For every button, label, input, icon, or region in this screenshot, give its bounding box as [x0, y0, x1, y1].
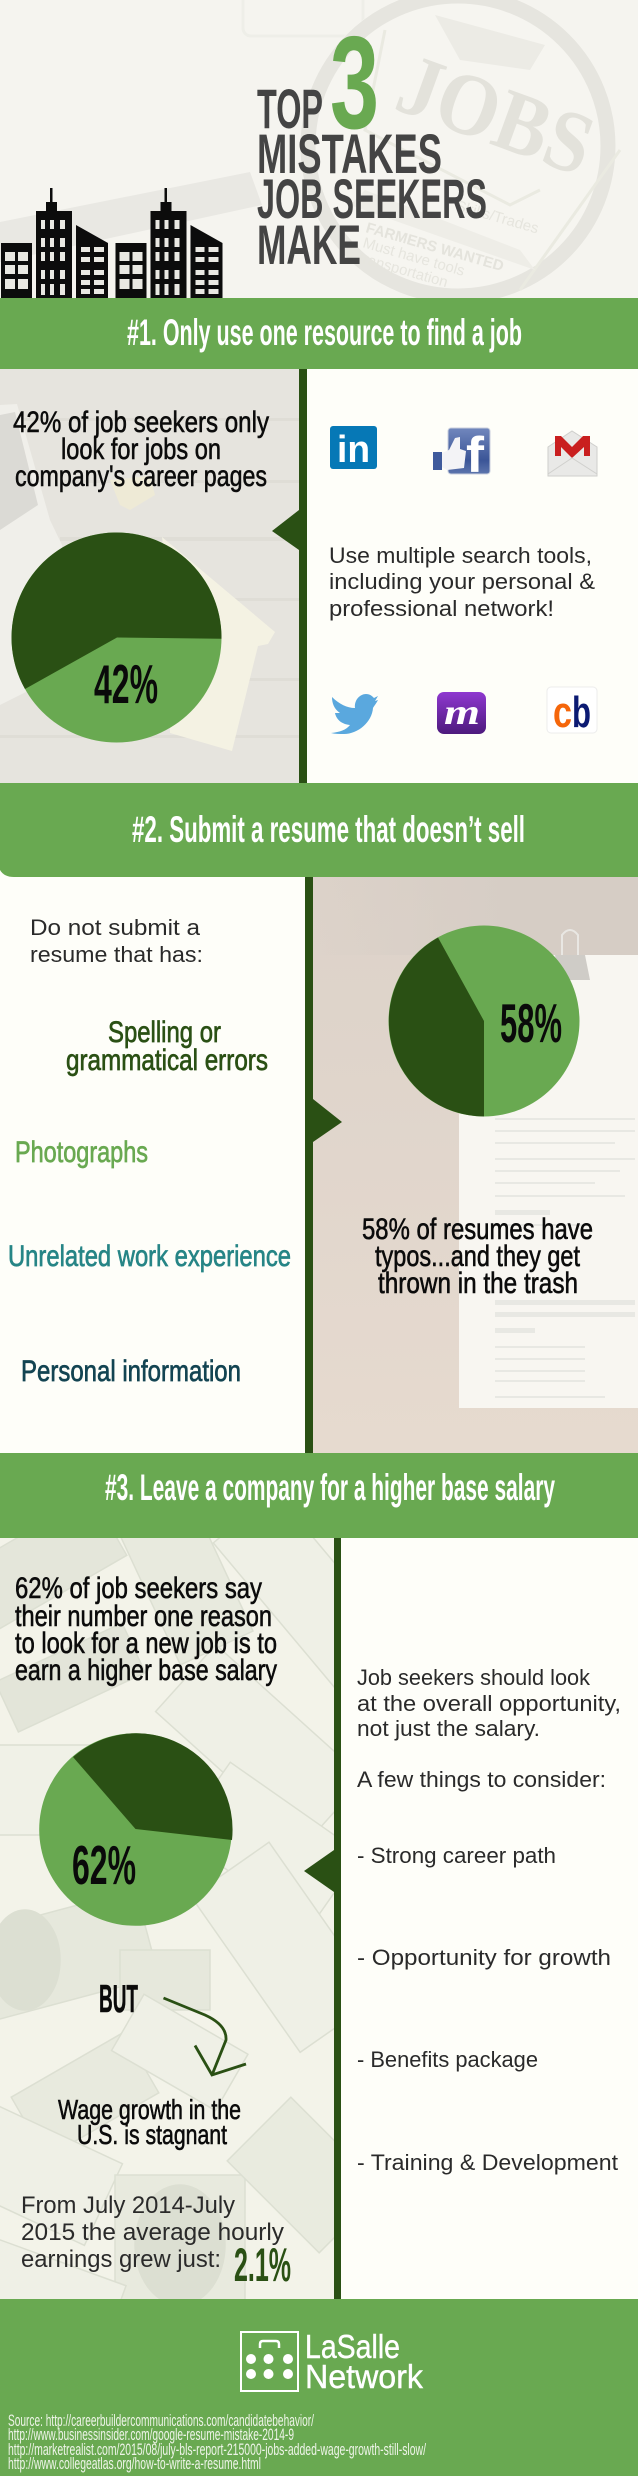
pie chart: 62 percent: [39, 1733, 233, 1926]
background photo: scattered dollar bills: [0, 1538, 334, 2299]
text: sources: http://www.businessinsider.com/google-resume-mistake-2014-9: [8, 2425, 294, 2444]
text: 42 percent of job seekers: look for jobs on: [61, 433, 221, 466]
pie chart: 58 percent: [388, 926, 580, 1116]
text: average hourly earnings: earnings grew just:: [21, 2246, 221, 2273]
list item: spelling or grammatical errors: [66, 1016, 268, 1077]
icon: Gmail envelope: [548, 431, 597, 476]
footer: [0, 2299, 638, 2476]
text: job seekers should look: [357, 1665, 621, 1741]
text: average hourly earnings: 2015 the average hourly: [21, 2219, 284, 2246]
panel: mistake 1 statistic: [0, 369, 299, 783]
icon: first building group: [1, 188, 108, 298]
text: wage growth is stagnant: U.S. is stagnant: [77, 2119, 227, 2150]
background photo: magnifying glass over jobs listing: Must have tools: [361, 235, 467, 280]
icon: CareerBuilder: b: [572, 688, 591, 737]
arrow: but to wage growth: [164, 1998, 246, 2075]
list item: personal information: Personal information: [21, 1355, 241, 1388]
text: use multiple search tools: [329, 543, 595, 621]
list item: benefits package: - Benefits package: [357, 2047, 538, 2072]
background photo: clipped resume: [459, 929, 638, 1408]
icon: Twitter bird: [331, 694, 378, 734]
background photo: magnifying glass over jobs listing: [0, 0, 620, 304]
text: job seekers should look: not just the salary.: [357, 1716, 540, 1741]
list item: unrelated work experience: Unrelated work experience: [8, 1240, 291, 1273]
statistic: 2.1 percent: 2.1%: [234, 2238, 291, 2291]
text: 62 percent of job seekers: [15, 1572, 277, 1687]
icon: Monster: [437, 692, 486, 734]
text: 58 percent of resumes have typos: typos...and they get: [375, 1240, 581, 1273]
divider with arrow: mistake 2: [305, 875, 342, 1453]
pie chart: 58 percent: 58%: [500, 992, 562, 1054]
panel: mistake 1 advice: [307, 369, 638, 783]
section header: #1: [0, 298, 638, 369]
text: 42 percent of job seekers: 42% of job seekers only: [13, 406, 269, 439]
text: job seekers should look: at the overall opportunity,: [357, 1691, 621, 1716]
section header: #2: [0, 783, 638, 877]
heading: top 3 mistakes job seekers make: 3: [330, 9, 379, 156]
text: use multiple search tools: professional network!: [329, 596, 554, 621]
text: do not submit a resume: [30, 915, 203, 967]
background photo: magnifying glass over jobs listing: transportation: [357, 250, 450, 291]
text: average hourly earnings: From July 2014-July: [21, 2192, 235, 2219]
panel: mistake 3 advice: [341, 1538, 638, 2299]
text: 42 percent of job seekers: company's career pages: [15, 460, 267, 493]
text: average hourly earnings: [21, 2192, 284, 2273]
text: do not submit a resume: resume that has:: [30, 942, 203, 967]
heading: top 3 mistakes job seekers make: TOP: [257, 77, 323, 140]
icon: city skyline: [1, 188, 222, 298]
pie chart: 42 percent: [12, 532, 222, 742]
panel: mistake 2 list: [0, 875, 305, 1453]
divider with arrow: mistake 1: [272, 369, 307, 783]
text: 58 percent of resumes have typos: thrown in the trash: [378, 1267, 578, 1300]
text: sources: http://www.collegeatlas.org/how-to-write-a-resume.html: [8, 2454, 261, 2473]
list item: photographs: Photographs: [15, 1136, 148, 1169]
heading: top 3 mistakes job seekers make: [257, 9, 487, 276]
list item: opportunity for growth: - Opportunity for growth: [357, 1945, 611, 1970]
text: a few things to consider: A few things to consider:: [357, 1767, 606, 1792]
list item: spelling or grammatical errors: grammatical errors: [66, 1044, 268, 1077]
list item: training and development: - Training & Development: [357, 2150, 618, 2175]
icon: LinkedIn: [330, 426, 377, 471]
background photo: magnifying glass over jobs listing: JOBS: [385, 36, 606, 195]
background photo: wood desk with laptop and notepad: [0, 404, 299, 751]
text: 62 percent of job seekers: their number one reason: [15, 1600, 272, 1633]
icon: LinkedIn: in: [337, 429, 370, 471]
logo: LaSalle Network: LaSalle: [305, 2328, 400, 2365]
panel: title area: [0, 0, 638, 304]
icon: Facebook like: f: [466, 427, 484, 483]
text: 62 percent of job seekers: to look for a new job is to: [15, 1627, 277, 1660]
logo: LaSalle Network: [241, 2328, 423, 2395]
divider with arrow: mistake 3: [304, 1538, 341, 2299]
background photo: magnifying glass over jobs listing: FARMERS WANTED: [364, 220, 506, 275]
pie chart: 42 percent: 42%: [94, 653, 158, 715]
list item: strong career path: - Strong career path: [357, 1843, 556, 1868]
pie chart: 62 percent: 62%: [72, 1834, 136, 1896]
text: 62 percent of job seekers: 62% of job seekers say: [15, 1572, 262, 1605]
panel: mistake 3 statistics: BUT: [99, 1978, 138, 2021]
icon: CareerBuilder: c: [553, 688, 572, 737]
icon: CareerBuilder: [547, 687, 597, 737]
text: 42 percent of job seekers: [13, 406, 269, 493]
heading: top 3 mistakes job seekers make: MAKE: [257, 213, 361, 276]
logo: LaSalle Network: Network: [305, 2358, 423, 2395]
text: use multiple search tools: Use multiple search tools,: [329, 543, 592, 568]
text: sources: [8, 2411, 426, 2473]
text: 58 percent of resumes have typos: [362, 1213, 593, 1300]
panel: mistake 3 statistics: [0, 1538, 334, 2299]
text: job seekers should look: Job seekers should look: [357, 1665, 591, 1690]
icon: Monster: m: [444, 692, 480, 732]
background photo: magnifying glass over jobs listing: Skills/Trades: [454, 198, 541, 237]
icon: second building group: [116, 188, 222, 298]
icon: Facebook like: [433, 427, 490, 483]
panel: mistake 2 statistic: [313, 875, 638, 1453]
text: do not submit a resume: Do not submit a: [30, 915, 201, 940]
text: use multiple search tools: including your personal &: [329, 569, 595, 594]
section header: #3: [0, 1453, 638, 1538]
text: sources: Source: http://careerbuildercommunications.com/candidatebehavior/: [8, 2411, 314, 2430]
text: wage growth is stagnant: Wage growth in the: [58, 2094, 241, 2125]
list item: spelling or grammatical errors: Spelling or: [108, 1016, 221, 1049]
text: wage growth is stagnant: [58, 2094, 241, 2150]
heading: top 3 mistakes job seekers make: MISTAKES: [257, 122, 442, 185]
text: 62 percent of job seekers: earn a higher base salary: [15, 1654, 277, 1687]
